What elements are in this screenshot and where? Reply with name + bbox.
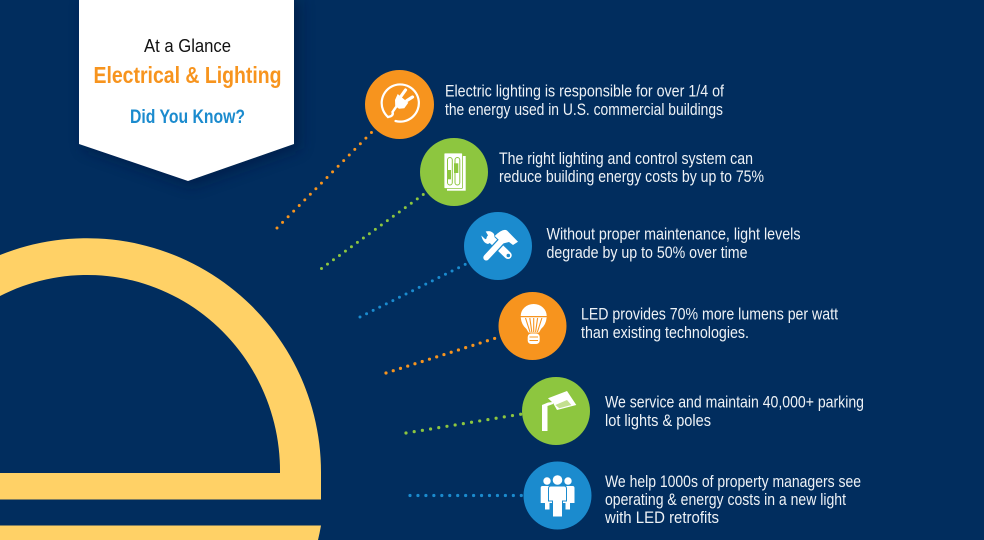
- icon: control panel: [420, 138, 488, 206]
- item: control system fact: [420, 138, 764, 206]
- banner shadow: [84, 0, 300, 186]
- dotted connector: blue 2: [410, 494, 522, 497]
- heading: electrical and lighting: Electrical & Lighting: [94, 62, 282, 88]
- icon: plug: [365, 70, 434, 139]
- icon: parking lot light: [522, 377, 590, 445]
- text: property managers: We help 1000s of property managers see: [605, 473, 861, 491]
- item: parking lot fact: lot lights & poles: [605, 412, 711, 430]
- icon: people: [524, 462, 592, 530]
- item: property managers fact: [524, 462, 861, 530]
- item: electric lighting fact: the energy used in U.S. commercial buildings: [445, 101, 723, 119]
- icon: wrench and hammer: [464, 212, 532, 280]
- item: maintenance fact: [464, 212, 800, 280]
- text: control system: The right lighting and control system can: [499, 150, 753, 168]
- item: property managers fact: with LED retrofits: [604, 509, 719, 527]
- heading: at a glance: At a Glance: [144, 35, 231, 56]
- item: maintenance fact: degrade by up to 50% over time: [546, 244, 748, 262]
- item: parking lot fact: [522, 377, 864, 445]
- text: LED: LED provides 70% more lumens per watt: [581, 306, 838, 324]
- text: parking lot: We service and maintain 40,000+ parking: [605, 394, 864, 412]
- item: LED fact: than existing technologies.: [581, 324, 749, 342]
- icon: light bulb: [498, 292, 566, 360]
- item: property managers fact: operating & energy costs in a new light: [605, 491, 846, 509]
- dotted connector: blue 1: [360, 264, 466, 317]
- item: LED fact: [498, 292, 838, 360]
- dotted connector: green 1: [322, 194, 424, 268]
- dotted connector: orange 2: [386, 338, 496, 373]
- item: electric lighting fact: [365, 70, 724, 139]
- item: control system fact: reduce building energy costs by up to 75%: [499, 168, 764, 186]
- text: electric lighting: Electric lighting is responsible for over 1/4 of: [445, 82, 724, 100]
- dotted connector: green 2: [406, 414, 522, 433]
- heading: did you know: Did You Know?: [130, 106, 245, 128]
- banner: [79, 0, 294, 181]
- light bulb outline graphic: [0, 238, 321, 540]
- text: maintenance: Without proper maintenance, light levels: [546, 226, 800, 244]
- dotted connector: orange 1: [277, 132, 372, 228]
